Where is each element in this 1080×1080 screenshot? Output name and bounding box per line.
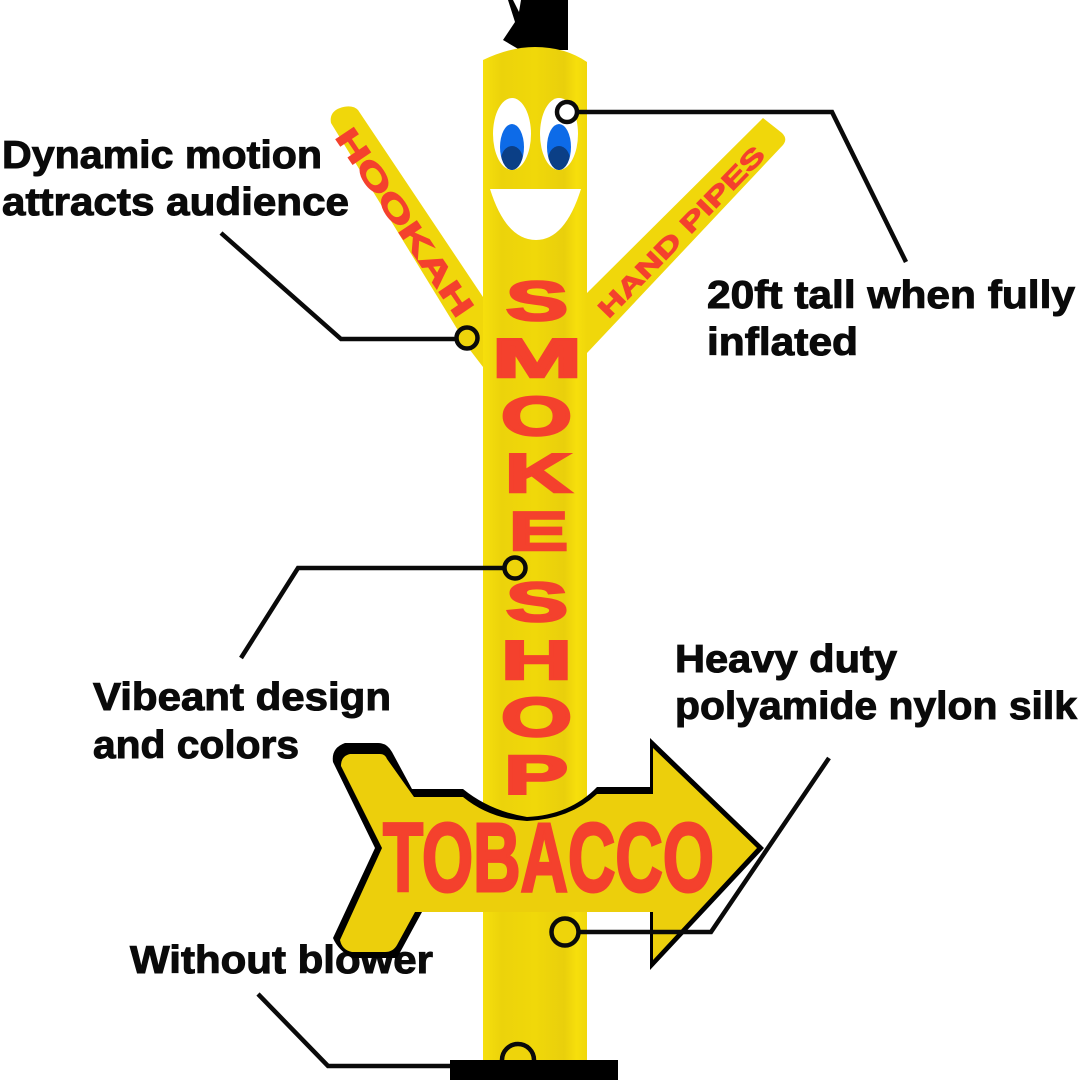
callout: without blower leader xyxy=(258,994,534,1066)
left arm: hookah xyxy=(329,106,483,367)
vertical text: smokeshop: K xyxy=(505,442,571,504)
text: without blower: Without blower xyxy=(130,939,433,982)
vertical text: smokeshop: S xyxy=(506,270,568,332)
vertical text: smokeshop: M xyxy=(492,327,582,389)
callout: heavy duty: polyamide nylon silk xyxy=(675,685,1077,728)
callout: heavy duty: Heavy duty xyxy=(675,638,897,681)
vertical text: smokeshop: H xyxy=(501,629,572,691)
vertical text: smokeshop: O xyxy=(501,686,572,748)
right arm: hand pipes xyxy=(587,118,785,353)
callout: heavy duty xyxy=(552,638,1077,946)
vertical text: smokeshop: S xyxy=(506,571,568,633)
callout: dynamic motion: Dynamic motion xyxy=(2,134,322,177)
callout: 20ft tall: 20ft tall when fully xyxy=(707,274,1075,317)
callout: vibrant design: Vibeant design xyxy=(93,676,391,719)
mouth xyxy=(490,189,581,240)
air dancer figure xyxy=(329,0,785,1062)
vertical text: smokeshop xyxy=(492,270,582,806)
callout: 20ft tall: inflated xyxy=(707,321,858,364)
vertical text: smokeshop: E xyxy=(509,500,568,562)
right arm: hand pipes: HAND PIPES xyxy=(593,141,771,323)
callout: vibrant design xyxy=(93,558,526,767)
callout: dynamic motion: attracts audience xyxy=(2,181,349,224)
callout: dynamic motion xyxy=(2,134,478,348)
left arm: hookah: HOOKAH xyxy=(329,121,481,323)
top tassel xyxy=(503,0,568,50)
tube body xyxy=(483,47,587,1062)
vertical text: smokeshop: O xyxy=(501,385,572,447)
arrow sign: tobacco: TOBACCO xyxy=(383,803,714,912)
vertical text: smokeshop: P xyxy=(504,744,568,806)
arrow sign: tobacco xyxy=(333,738,764,970)
base: blower mount xyxy=(450,1060,618,1080)
eyes xyxy=(493,98,578,174)
callout: vibrant design: and colors xyxy=(93,724,299,767)
callout: 20ft tall xyxy=(557,102,1075,364)
